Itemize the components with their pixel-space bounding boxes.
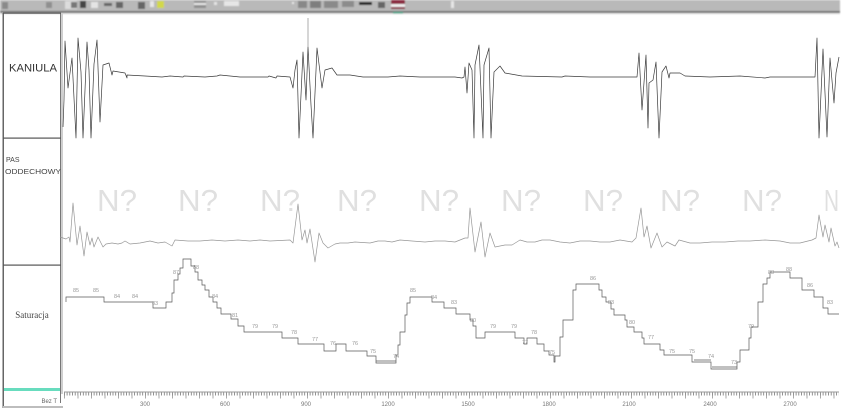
data labels: saturation values: 84 xyxy=(114,294,120,300)
time axis: Bez T xyxy=(41,399,57,405)
chart: oxygen saturation step trace xyxy=(66,259,839,369)
data labels: saturation values: 76 xyxy=(330,341,336,347)
panel: label column xyxy=(2,12,63,408)
data labels: saturation values: 77 xyxy=(648,335,654,341)
time axis: 900 xyxy=(301,402,312,408)
heading: PAS ODDECHOWY: PAS xyxy=(6,157,20,164)
watermark: repeated N? marks: N? xyxy=(260,183,300,218)
data labels: saturation values: 85 xyxy=(93,288,99,294)
data labels: saturation values: 79 xyxy=(272,324,278,330)
data labels: saturation values: 73 xyxy=(731,360,737,366)
chart: cannula airflow trace xyxy=(63,18,839,138)
data labels: saturation values: 79 xyxy=(252,324,258,330)
watermark: repeated N? marks: N? xyxy=(583,183,623,218)
watermark: repeated N? marks: N? xyxy=(419,183,459,218)
data labels: saturation values: 83 xyxy=(608,300,614,306)
data labels: saturation values: 79 xyxy=(748,324,754,330)
time axis: 1200 xyxy=(381,402,395,408)
time axis: 2100 xyxy=(622,402,636,408)
watermark: repeated N? marks: N? xyxy=(742,183,782,218)
data labels: saturation values: 78 xyxy=(531,330,537,336)
heading: PAS ODDECHOWY: ODDECHOWY xyxy=(5,169,61,176)
data labels: saturation values xyxy=(73,265,833,366)
watermark: repeated N? marks xyxy=(97,183,839,218)
data labels: saturation values: 76 xyxy=(352,341,358,347)
watermark: repeated N? marks: N? xyxy=(97,183,137,218)
data labels: saturation values: 77 xyxy=(522,340,528,346)
data labels: saturation values: 81 xyxy=(232,313,238,319)
time axis xyxy=(41,392,839,408)
toolbar xyxy=(0,0,840,14)
data labels: saturation values: 79 xyxy=(511,324,517,330)
data labels: saturation values: 88 xyxy=(193,265,199,271)
data labels: saturation values: 75 xyxy=(370,349,376,355)
data labels: saturation values: 80 xyxy=(629,320,635,326)
data labels: saturation values: 74 xyxy=(393,354,399,360)
data labels: saturation values: 83 xyxy=(152,301,158,307)
data labels: saturation values: 88 xyxy=(768,270,774,276)
data labels: saturation values: 75 xyxy=(549,350,555,356)
heading: Saturacja: Saturacja xyxy=(15,310,49,320)
data labels: saturation values: 85 xyxy=(73,288,79,294)
watermark: repeated N? marks: N? xyxy=(660,183,700,218)
data labels: saturation values: 84 xyxy=(132,294,138,300)
heading: KANIULA: KANIULA xyxy=(9,62,58,74)
data labels: saturation values: 84 xyxy=(212,294,218,300)
time axis: 600 xyxy=(220,402,231,408)
watermark: repeated N? marks: N xyxy=(824,183,839,218)
data labels: saturation values: 75 xyxy=(669,349,675,355)
data labels: saturation values: 83 xyxy=(827,300,833,306)
data labels: saturation values: 78 xyxy=(291,330,297,336)
heading: PAS ODDECHOWY xyxy=(5,157,61,176)
data labels: saturation values: 87 xyxy=(173,270,179,276)
chart: respiratory belt trace xyxy=(60,203,839,262)
data labels: saturation values: 77 xyxy=(312,337,318,343)
time axis: 2700 xyxy=(783,402,797,408)
data labels: saturation values: 79 xyxy=(490,324,496,330)
watermark: repeated N? marks: N? xyxy=(501,183,541,218)
time axis: 1500 xyxy=(461,402,475,408)
data labels: saturation values: 80 xyxy=(470,318,476,324)
data labels: saturation values: 83 xyxy=(451,300,457,306)
time axis: 2400 xyxy=(703,402,717,408)
data labels: saturation values: 86 xyxy=(807,283,813,289)
data labels: saturation values: 84 xyxy=(431,295,437,301)
time axis: 1800 xyxy=(542,402,556,408)
watermark: repeated N? marks: N? xyxy=(178,183,218,218)
data labels: saturation values: 86 xyxy=(590,276,596,282)
data labels: saturation values: 85 xyxy=(410,288,416,294)
data labels: saturation values: 74 xyxy=(708,354,714,360)
watermark: repeated N? marks: N? xyxy=(337,183,377,218)
data labels: saturation values: 75 xyxy=(689,349,695,355)
time axis: 300 xyxy=(140,402,151,408)
data labels: saturation values: 88 xyxy=(786,267,792,273)
